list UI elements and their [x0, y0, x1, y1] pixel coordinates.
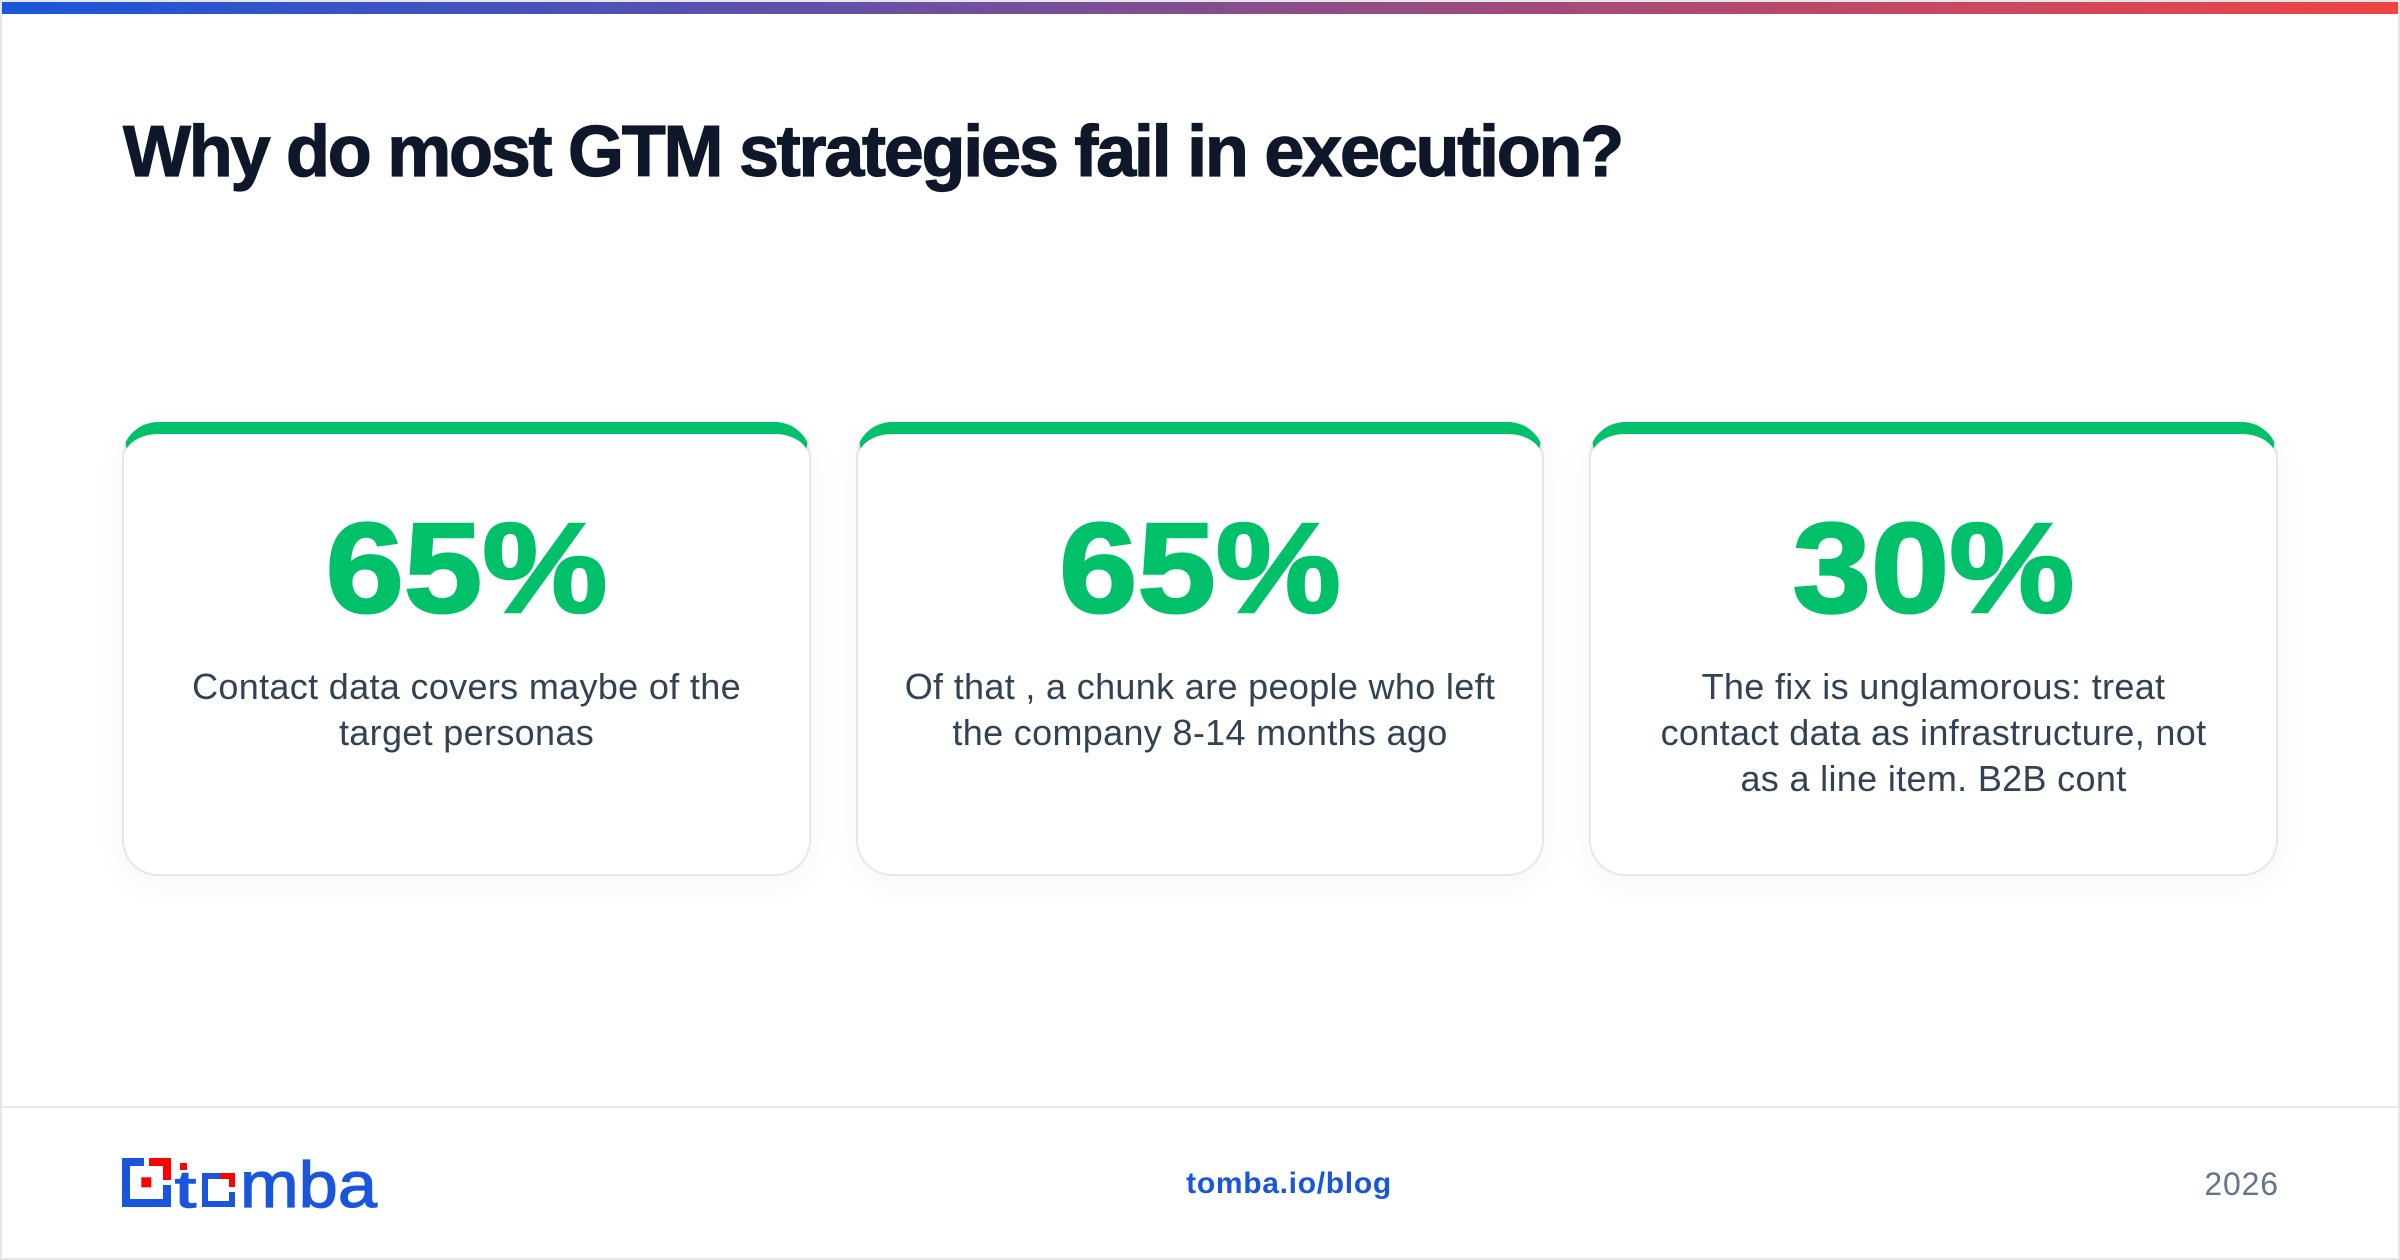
footer link: tomba.io/blog — [1186, 1167, 1392, 1200]
stat number: 30% — [1793, 497, 2074, 640]
stat description: target personas — [339, 712, 594, 753]
panel: stat card 3 — [1589, 422, 2278, 876]
title: Why do most GTM strategies fail in execution? — [123, 112, 1622, 192]
top gradient bar — [2, 2, 2398, 14]
stat description: the company 8-14 months ago — [952, 712, 1448, 753]
logo: tomba: mba — [240, 1148, 378, 1221]
stat description: Of that , a chunk are people who left — [905, 666, 1495, 707]
footer year: 2026 — [2204, 1166, 2279, 1202]
stat description: Contact data covers maybe of the — [192, 666, 741, 707]
panel: stat card 2 — [856, 422, 1544, 876]
stat description: The fix is unglamorous: treat — [1702, 666, 2165, 707]
stat description — [1661, 666, 2206, 799]
stat description — [192, 666, 741, 753]
footer divider — [2, 1106, 2398, 1108]
stat description — [905, 666, 1495, 753]
stat description: contact data as infrastructure, not — [1661, 712, 2206, 753]
panel: stat card 1 — [122, 422, 811, 876]
logo: tomba: t — [175, 1161, 197, 1219]
stat number: 65% — [1059, 497, 1341, 640]
stat description: as a line item. B2B cont — [1740, 758, 2127, 799]
stat number: 65% — [326, 497, 607, 640]
